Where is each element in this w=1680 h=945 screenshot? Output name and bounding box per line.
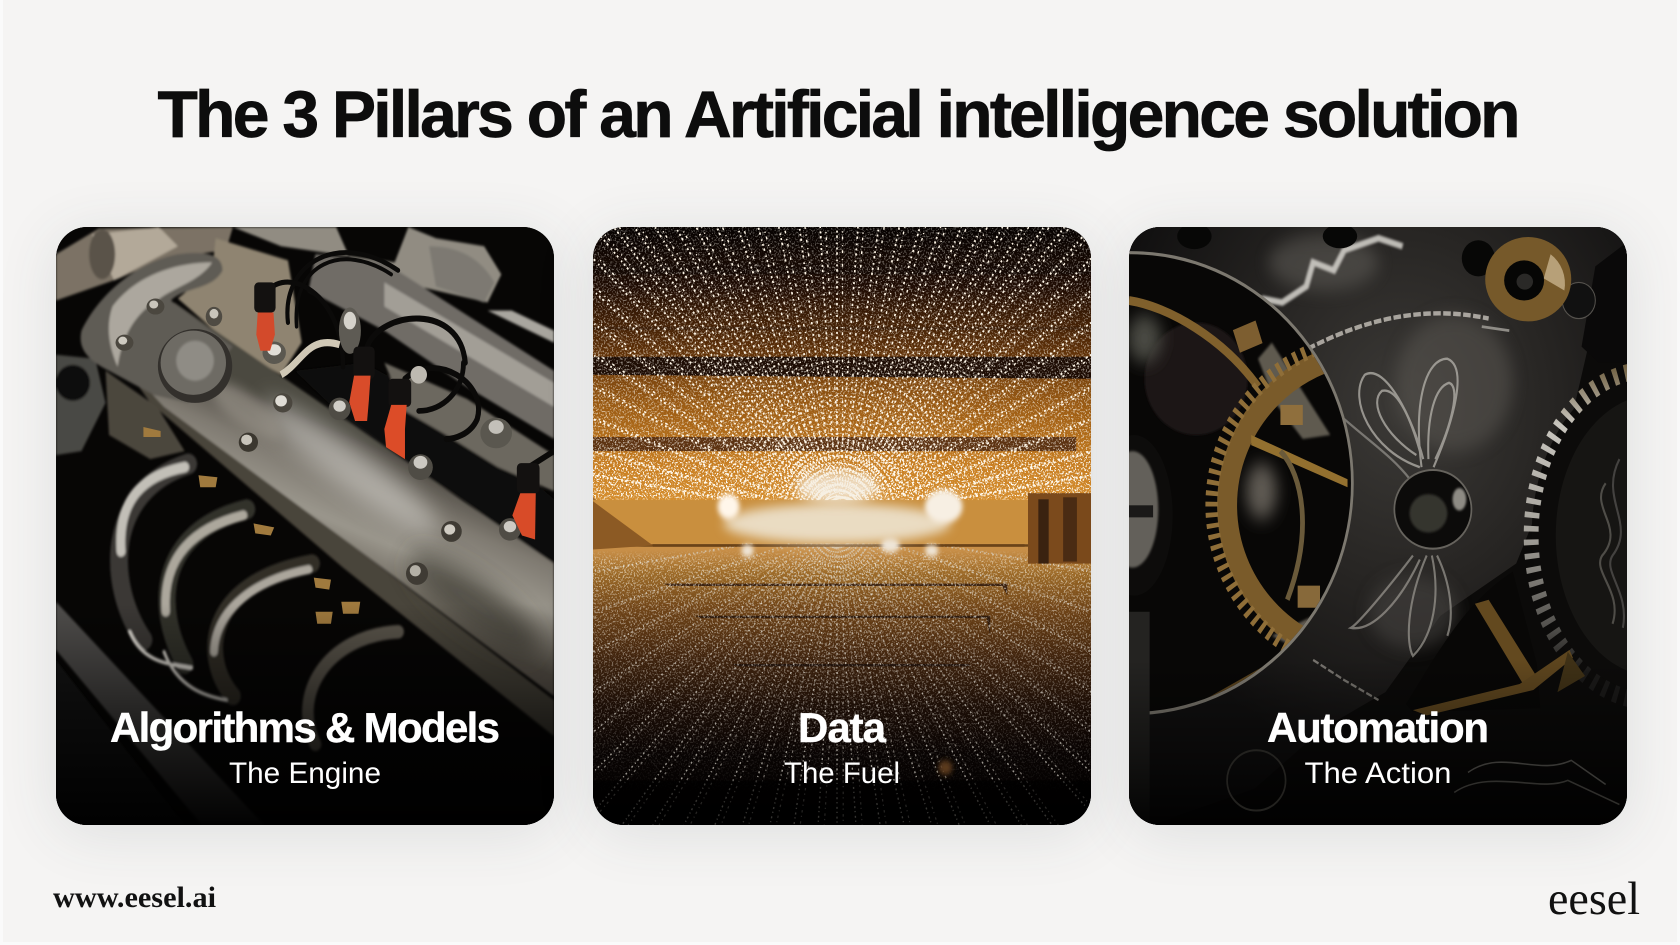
right gear	[1532, 371, 1680, 700]
label: Algorithms & Models, The Engine: The Engine	[229, 757, 381, 790]
dark gutter	[295, 363, 554, 572]
center pivot	[1394, 470, 1471, 549]
title: The 3 Pillars of an Artificial intelligence solution	[158, 77, 1520, 151]
bolts	[116, 298, 521, 624]
left screw	[1096, 435, 1173, 596]
photo: clockwork gears	[1129, 227, 1627, 825]
upper rail	[309, 254, 554, 439]
label: Automation, The Action	[1267, 704, 1489, 790]
rail highlights	[253, 386, 447, 549]
top left pipe	[56, 227, 233, 300]
plate	[1129, 227, 1627, 825]
base block left	[106, 371, 185, 459]
secondary pieces	[1144, 323, 1248, 435]
photo: lights	[593, 227, 1091, 825]
label: Automation, The Action: The Action	[1304, 757, 1452, 790]
exhaust pipes	[119, 464, 398, 744]
flange	[119, 359, 554, 736]
bright points	[717, 494, 739, 519]
engraved edge	[1308, 313, 1489, 349]
panel: Automation	[1129, 227, 1627, 825]
background left parts	[56, 355, 106, 455]
window opening	[908, 251, 1354, 715]
speckle	[592, 227, 1090, 825]
dotted rays	[592, 227, 1097, 825]
footer: website url: www.eesel.ai	[53, 882, 216, 914]
brass jewel	[1485, 237, 1571, 321]
spark plugs	[254, 282, 540, 539]
bottom darken	[592, 780, 1090, 825]
label: Algorithms & Models, The Engine	[110, 704, 500, 790]
footer: eesel logo: eesel	[1548, 873, 1640, 925]
top screws	[1177, 223, 1212, 249]
lower dim strip	[56, 602, 264, 825]
lower tiers	[663, 584, 1007, 596]
label: Algorithms & Models, The Engine: Algorithms & Models	[110, 704, 500, 751]
left curved end	[81, 253, 233, 403]
label: Data, The Fuel: Data	[798, 704, 886, 751]
panel: Data	[592, 227, 1090, 825]
plate highlights	[1268, 234, 1379, 290]
glow	[592, 500, 1028, 543]
photo: engine	[56, 227, 554, 825]
cap	[158, 329, 232, 403]
panel: Algorithms & Models	[56, 227, 554, 825]
beige head	[178, 238, 302, 375]
bottom fade	[1129, 660, 1627, 825]
spokes	[1251, 435, 1348, 487]
main rail	[119, 303, 554, 696]
flower engraving	[1344, 359, 1458, 483]
gear ring	[1217, 354, 1324, 642]
upper brass arc	[1129, 300, 1258, 387]
label: Data, The Fuel	[784, 704, 900, 790]
lower black area and brass arms	[1406, 572, 1540, 712]
side wall	[1028, 493, 1090, 564]
ceiling tiers	[592, 357, 1090, 379]
bottom fade	[56, 604, 554, 825]
label: Automation, The Action: Automation	[1267, 704, 1489, 751]
wires	[264, 253, 554, 467]
label: Data, The Fuel: The Fuel	[784, 757, 900, 790]
side wall and ramp over rays	[1028, 493, 1090, 564]
